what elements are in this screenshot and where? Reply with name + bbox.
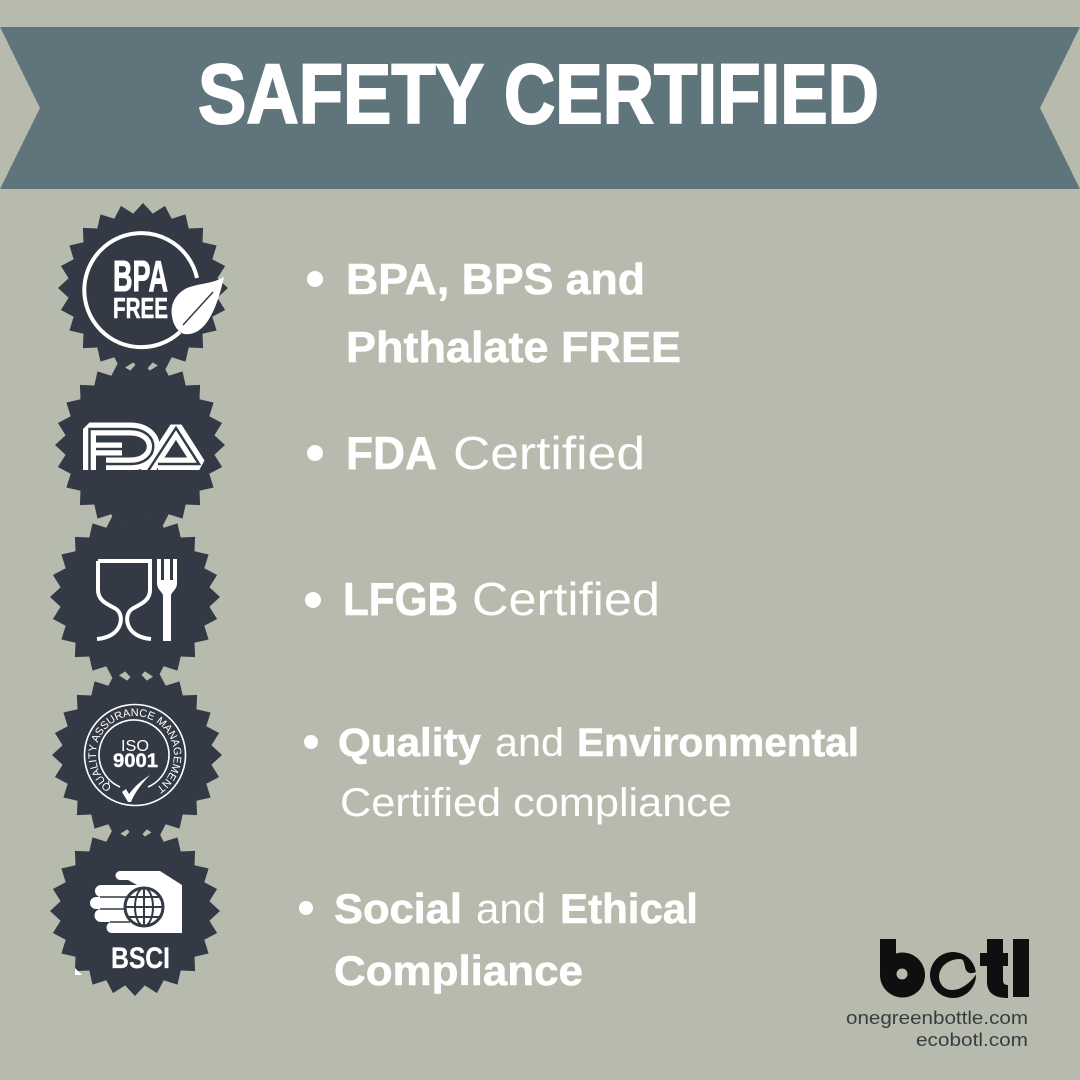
badge: ISO 9001	[52, 674, 222, 835]
badge: ISO 9001: ISO	[121, 738, 149, 755]
item: quality and environmental compliance: Environmental	[577, 721, 859, 765]
badge: FDA	[55, 360, 225, 530]
badge: BPA free	[58, 203, 228, 373]
badge: BSCI: BSCI	[111, 942, 170, 975]
badge: ISO 9001: QUALITY ASSURANCE MANAGEMENT	[88, 708, 182, 794]
badge: ISO 9001: 9001	[113, 750, 158, 772]
item: FDA certified	[307, 427, 645, 479]
item: social and ethical compliance	[299, 885, 698, 994]
title	[198, 47, 879, 141]
item: social and ethical compliance: Ethical	[560, 885, 698, 932]
item: BPA, BPS and Phthalate free: BPA, BPS and	[346, 255, 645, 304]
logo: botl	[880, 939, 1029, 998]
item: social and ethical compliance: Compliance	[334, 947, 583, 994]
website addresses: onegreenbottle.com	[846, 1008, 1028, 1028]
website addresses: ecobotl.com	[916, 1030, 1028, 1050]
badge: LFGB food safe	[50, 512, 220, 682]
item: quality and environmental compliance	[304, 721, 859, 825]
item: LFGB certified: Certified	[472, 573, 660, 625]
item: BPA, BPS and Phthalate free	[307, 255, 681, 372]
item: BPA, BPS and Phthalate free: Phthalate FREE	[346, 323, 681, 372]
website addresses	[846, 1008, 1028, 1050]
item: FDA certified: Certified	[453, 427, 645, 479]
title: SAFETY	[198, 47, 484, 141]
item: quality and environmental compliance: Quality	[338, 721, 482, 765]
badge: BPA free: FREE	[113, 293, 168, 325]
item: LFGB certified	[305, 573, 660, 625]
item: social and ethical compliance: and	[476, 885, 546, 932]
badge: BPA free: BPA	[113, 252, 168, 301]
item: social and ethical compliance: Social	[334, 885, 462, 932]
banner ribbon	[0, 27, 1080, 189]
item: FDA certified: FDA	[346, 427, 437, 479]
item: quality and environmental compliance: and	[495, 721, 564, 765]
item: quality and environmental compliance: Certified compliance	[340, 781, 732, 825]
title: CERTIFIED	[504, 47, 879, 141]
item: LFGB certified: LFGB	[343, 573, 458, 625]
badge: BSCI	[50, 826, 220, 996]
